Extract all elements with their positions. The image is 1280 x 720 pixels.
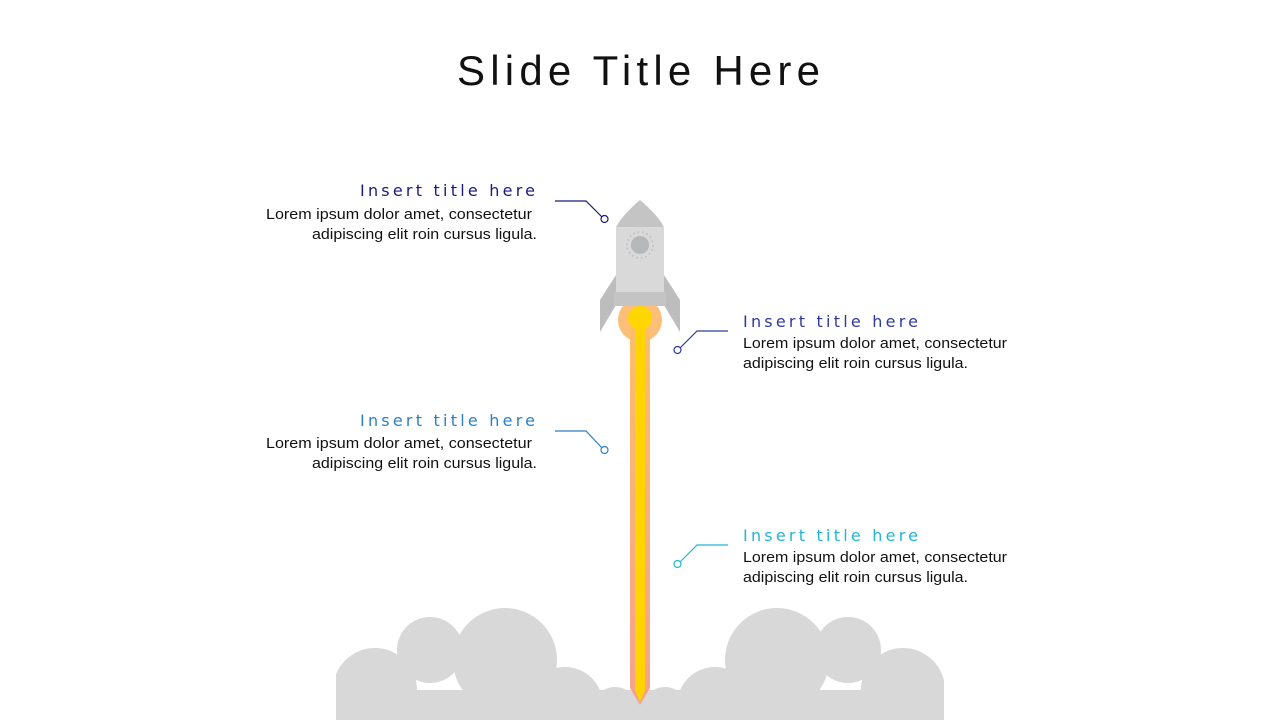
callout 4: Insert title here bbox=[743, 526, 918, 545]
callout 4: adipiscing elit roin cursus ligula. bbox=[743, 569, 968, 586]
callout 1: Insert title here bbox=[360, 181, 535, 200]
flame bbox=[618, 298, 662, 705]
callout 3: Lorem ipsum dolor amet, consectetur bbox=[266, 435, 532, 452]
callout 2: adipiscing elit roin cursus ligula. bbox=[743, 355, 968, 372]
callout 4 bbox=[674, 526, 1007, 586]
callout 2: Insert title here bbox=[743, 312, 918, 331]
clouds bbox=[333, 608, 945, 720]
callout 1: adipiscing elit roin cursus ligula. bbox=[312, 226, 537, 243]
callout 2: Lorem ipsum dolor amet, consectetur bbox=[743, 335, 1007, 352]
callout 3: adipiscing elit roin cursus ligula. bbox=[312, 455, 537, 472]
callout 1: Lorem ipsum dolor amet, consectetur bbox=[266, 206, 532, 223]
callout 2 bbox=[674, 312, 1007, 372]
rocket bbox=[600, 200, 680, 332]
callout 1 bbox=[266, 181, 608, 243]
callout 3: Insert title here bbox=[360, 411, 535, 430]
callout 3 bbox=[266, 411, 608, 472]
title: Slide Title Here bbox=[457, 47, 820, 94]
callout 4: Lorem ipsum dolor amet, consectetur bbox=[743, 549, 1007, 566]
